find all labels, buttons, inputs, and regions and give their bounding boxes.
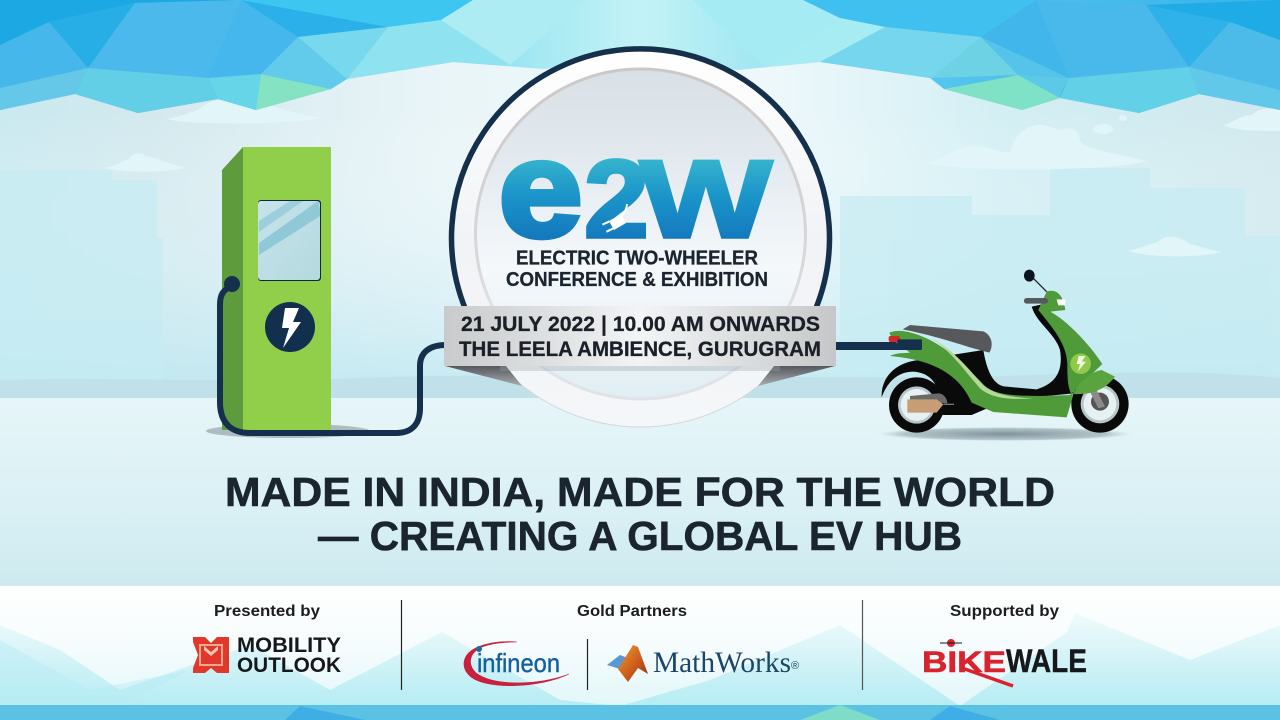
Infineon logo: infineon (477, 648, 560, 678)
MathWorks logo (607, 645, 799, 682)
electric scooter (882, 270, 1129, 433)
charging cable (220, 276, 446, 433)
ribbon folds (445, 366, 522, 386)
front shield (1038, 291, 1102, 397)
e2W logo: 2 (584, 138, 649, 261)
charger front face (243, 147, 331, 430)
label: Supported by (950, 603, 1059, 620)
mirror (1024, 270, 1047, 292)
icon: plug in the 2 (602, 204, 627, 233)
headline: MADE IN INDIA, MADE FOR THE WORLD (225, 469, 1055, 515)
body highlight (932, 338, 1033, 399)
charging connector (897, 339, 922, 350)
muffler (907, 393, 954, 413)
BikeWale logo: WALE (1006, 643, 1087, 679)
battery badge (1070, 353, 1091, 374)
EV charging station (222, 147, 331, 430)
footer bottom band (0, 705, 1280, 720)
Mobility Outlook logo: OUTLOOK (237, 654, 341, 677)
background: horizon band (0, 372, 1280, 588)
background: low-poly top banner (0, 0, 1280, 113)
tail light (889, 336, 900, 342)
Mobility Outlook logo: MOBILITY (237, 634, 341, 657)
e2W logo: W (640, 137, 772, 261)
event title (506, 248, 768, 291)
lightning icon badge (265, 302, 315, 352)
presented by section (193, 603, 341, 677)
ribbon text: THE LEELA AMBIENCE, GURUGRAM (459, 338, 821, 361)
scooter shadow (879, 427, 1131, 441)
e2W logo: e (499, 114, 582, 265)
seat (903, 325, 992, 353)
charger screen (258, 200, 321, 281)
footer background (0, 586, 1280, 706)
ribbon text (459, 313, 821, 361)
label: Gold Partners (577, 603, 687, 620)
Mobility Outlook logo (193, 634, 341, 677)
white ring (452, 49, 830, 427)
cable to scooter (834, 342, 922, 350)
supported by section (922, 603, 1087, 686)
divider (862, 600, 864, 690)
event title: ELECTRIC TWO-WHEELER (516, 248, 759, 270)
front wheel (1071, 375, 1129, 433)
BikeWale logo: BIKE (922, 646, 1006, 679)
headlight (1057, 299, 1065, 305)
black frame (882, 303, 1073, 415)
footer sponsor strip (0, 586, 1280, 720)
event badge circle (452, 49, 830, 427)
outer dark ring (452, 49, 830, 310)
label: Presented by (214, 603, 320, 620)
ribbon bar (444, 306, 836, 366)
MathWorks logo: MathWorks (653, 646, 791, 679)
front mudguard (1073, 370, 1115, 394)
charger side face (222, 147, 243, 430)
background: faded city skyline (0, 168, 1280, 398)
charger base shadow (206, 424, 370, 438)
headline (225, 469, 1055, 559)
divider (400, 600, 402, 690)
rear body panel (889, 331, 1073, 417)
inner disc (476, 69, 806, 399)
background: clouds (104, 100, 1280, 256)
ribbon text: 21 JULY 2022 | 10.00 AM ONWARDS (461, 313, 820, 336)
date and venue ribbon (444, 306, 836, 386)
background: sky (0, 0, 1280, 400)
MathWorks logo: ® (791, 660, 799, 672)
handlebar (1024, 298, 1048, 304)
event title: CONFERENCE & EXHIBITION (506, 269, 768, 291)
Infineon logo (464, 642, 569, 686)
gold partners section (464, 603, 799, 690)
BikeWale logo (922, 639, 1087, 686)
headline: — CREATING A GLOBAL EV HUB (318, 513, 962, 559)
e2W logo (499, 114, 772, 265)
rear wheel (889, 377, 944, 433)
